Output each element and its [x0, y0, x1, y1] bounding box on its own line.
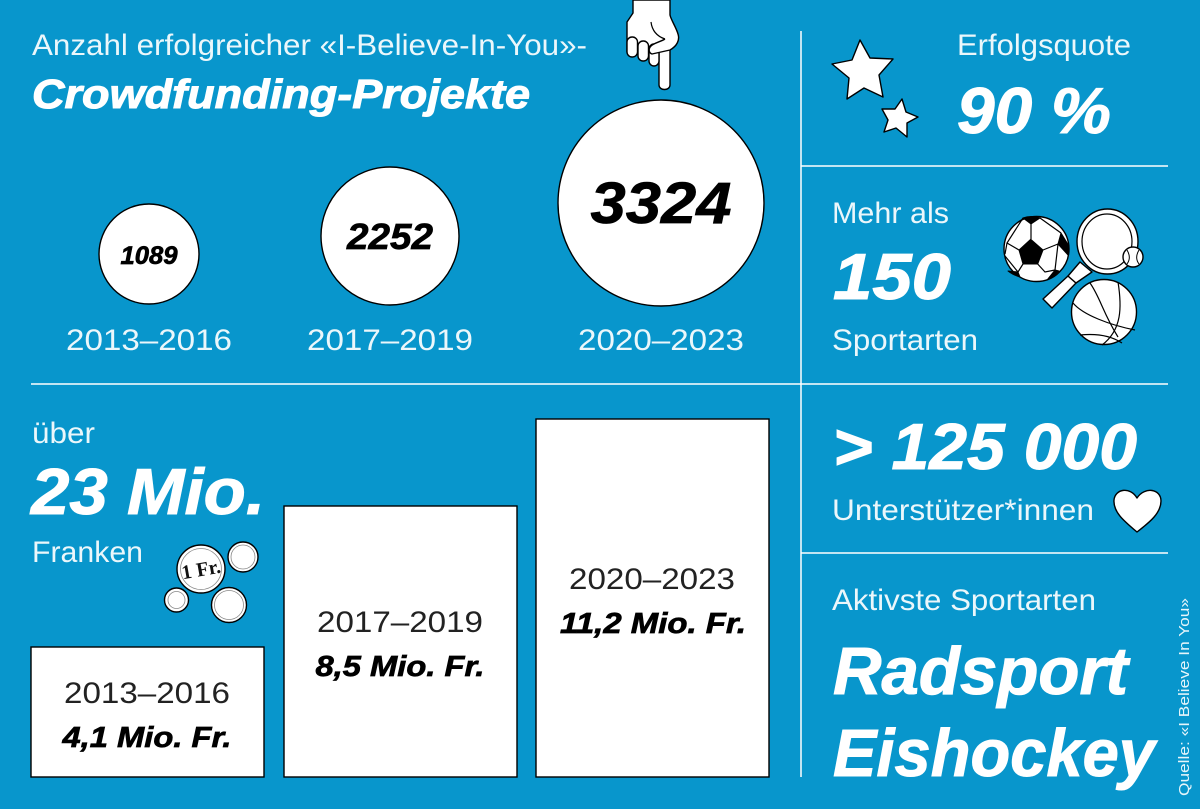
bar: 2020-2023: [536, 419, 769, 777]
heading: Crowdfunding-Projekte: Crowdfunding-Projekte: [32, 71, 530, 117]
circle: 2020-2023: 3324: [590, 171, 732, 236]
period labels: 2017–2019: [307, 324, 473, 357]
bar: 2017-2019: 2017–2019: [317, 606, 483, 639]
bar: 2013-2016: 2013–2016: [64, 677, 230, 710]
text: Radsport: Radsport: [833, 634, 1131, 709]
text: Sportarten: Sportarten: [832, 324, 978, 357]
panel: crowdfunding projects: [32, 0, 764, 357]
icon: heart: [1114, 490, 1161, 532]
panel: most active sports: [832, 584, 1159, 791]
number: more than 125 000: > 125 000: [833, 410, 1137, 483]
panel: success rate: [832, 29, 1131, 147]
text: über: über: [32, 417, 95, 450]
icon: football: [1004, 216, 1069, 282]
icon: sports balls and racket: [1004, 209, 1143, 345]
circle: 2017-2019: 2252: [346, 216, 433, 257]
bar: 2020-2023: 11,2 Mio. Fr.: [560, 608, 746, 640]
circle: 2017-2019: [321, 167, 459, 305]
text: Mehr als: Mehr als: [832, 197, 949, 230]
number: 90 %: 90 %: [957, 74, 1111, 147]
heading: projects intro: Anzahl erfolgreicher «I-Believe-In-You»-: [32, 29, 587, 62]
circle: 2013-2016: 1089: [120, 242, 178, 270]
panel: supporters: [832, 410, 1161, 532]
bar: 2013-2016: 4,1 Mio. Fr.: [61, 722, 232, 754]
icon: stars: [832, 40, 918, 137]
icon: pointing hand: [627, 0, 679, 90]
source note: Quelle: «I Believe In You»: [1176, 598, 1193, 796]
period labels: 2013–2016: [66, 324, 232, 357]
panel: sports: [832, 197, 1143, 357]
period labels: 2020–2023: [578, 324, 744, 357]
number: 150: 150: [833, 240, 951, 313]
bar: 2017-2019: [284, 506, 517, 777]
text: Aktivste Sportarten: Aktivste Sportarten: [832, 584, 1096, 617]
text: Eishockey: Eishockey: [833, 716, 1159, 791]
bar: 2013-2016: [31, 647, 264, 777]
bar: 2017-2019: 8,5 Mio. Fr.: [316, 651, 484, 683]
icon: coins: [164, 542, 258, 622]
text: Erfolgsquote: Erfolgsquote: [957, 29, 1131, 62]
text: Unterstützer*innen: Unterstützer*innen: [832, 494, 1094, 527]
text: Franken: Franken: [32, 536, 143, 569]
icon: coins: 1 Fr.: [180, 556, 222, 584]
period labels: [66, 324, 744, 357]
number: 23 Mio.: 23 Mio.: [29, 455, 265, 528]
panel: total amount: [29, 417, 769, 777]
icon: racket: [1043, 209, 1143, 308]
circle: 2013-2016: [99, 204, 199, 304]
circle: 2020-2023: [558, 100, 764, 306]
icon: basketball: [1072, 280, 1136, 345]
bar: 2020-2023: 2020–2023: [569, 563, 735, 596]
